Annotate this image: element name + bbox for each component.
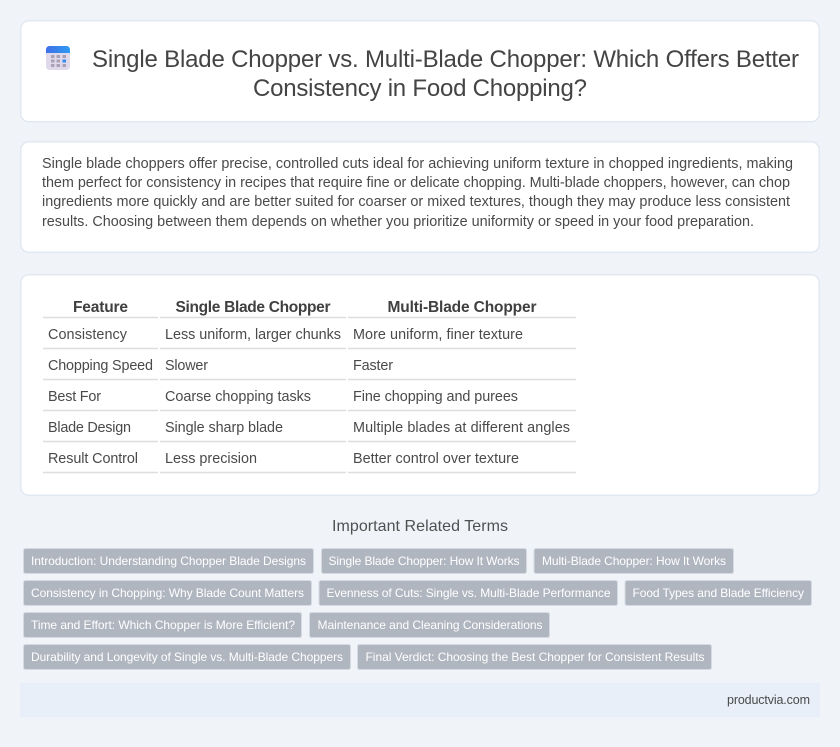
table header row: Multi-Blade Chopper	[388, 299, 536, 316]
panel: introduction text	[21, 142, 819, 252]
table header row: Feature	[73, 299, 128, 316]
tag: multi-blade: Multi-Blade Chopper: How It Works	[542, 554, 726, 568]
row: best for	[48, 389, 518, 405]
row: best for: Coarse chopping tasks	[165, 389, 311, 405]
tag: evenness: Evenness of Cuts: Single vs. Multi-Blade Performance	[326, 586, 611, 600]
row: blade design	[48, 420, 570, 436]
row: consistency: Less uniform, larger chunks	[165, 327, 341, 343]
tag: food types: Food Types and Blade Efficiency	[632, 586, 804, 600]
row: chopping speed	[48, 358, 393, 374]
panel: comparison table	[21, 275, 819, 495]
tag: consistency: Consistency in Chopping: Why Blade Count Matters	[31, 586, 304, 600]
title	[92, 46, 799, 102]
tag: evenness	[319, 580, 618, 606]
table header row	[73, 299, 536, 316]
intro paragraph: them perfect for consistency in recipes that require fine or delicate chopping. Multi-blade choppers, however, can chop	[42, 175, 790, 191]
tag: introduction: Introduction: Understanding Chopper Blade Designs	[31, 554, 306, 568]
related terms tags	[24, 548, 812, 670]
title: Single Blade Chopper vs. Multi-Blade Chopper: Which Offers Better	[92, 46, 799, 73]
tag: multi-blade	[534, 548, 734, 574]
row: chopping speed: Faster	[353, 358, 393, 374]
footer bar	[20, 683, 820, 717]
title: Consistency in Food Chopping?	[253, 75, 587, 102]
row: chopping speed: Chopping Speed	[48, 358, 153, 374]
row: consistency: Consistency	[48, 327, 128, 343]
intro paragraph	[42, 156, 793, 230]
footer source: productvia.com	[727, 693, 810, 707]
tag: single blade	[322, 548, 526, 574]
panel: title header	[21, 21, 819, 122]
intro paragraph: ingredients more quickly and are better suited for coarser or mixed textures, though they may produce less consistent	[42, 194, 790, 210]
row: consistency: More uniform, finer texture	[353, 327, 523, 343]
tag: time and effort: Time and Effort: Which Chopper is More Efficient?	[31, 618, 295, 632]
row: result control: Less precision	[165, 451, 257, 467]
heading: important related terms: Important Related Terms	[332, 518, 508, 535]
tag: single blade: Single Blade Chopper: How It Works	[328, 554, 520, 568]
row: result control: Better control over texture	[353, 451, 519, 467]
row: consistency	[48, 327, 523, 343]
tag: final verdict	[358, 644, 712, 670]
row: blade design: Single sharp blade	[165, 420, 283, 436]
tag: durability	[24, 644, 350, 670]
row: best for: Fine chopping and purees	[353, 389, 518, 405]
row: result control: Result Control	[48, 451, 138, 467]
tag: maintenance	[310, 612, 550, 638]
row: blade design: Blade Design	[48, 420, 131, 436]
tag: time and effort	[24, 612, 302, 638]
tag: final verdict: Final Verdict: Choosing the Best Chopper for Consistent Results	[366, 650, 704, 664]
tag: durability: Durability and Longevity of Single vs. Multi-Blade Choppers	[31, 650, 343, 664]
tag: consistency	[24, 580, 312, 606]
tag: maintenance: Maintenance and Cleaning Considerations	[318, 618, 542, 632]
table header row: Single Blade Chopper	[176, 299, 330, 316]
intro paragraph: results. Choosing between them depends on whether you prioritize uniformity or speed in your food preparation.	[42, 214, 754, 230]
tag: introduction	[24, 548, 314, 574]
row: result control	[48, 451, 519, 467]
row: chopping speed: Slower	[165, 358, 208, 374]
row: blade design: Multiple blades at different angles	[353, 420, 570, 436]
icon: calendar grid	[46, 46, 70, 70]
intro paragraph: Single blade choppers offer precise, controlled cuts ideal for achieving uniform texture in chopped ingredients, making	[42, 156, 793, 172]
row: best for: Best For	[48, 389, 101, 405]
tag: food types	[625, 580, 812, 606]
